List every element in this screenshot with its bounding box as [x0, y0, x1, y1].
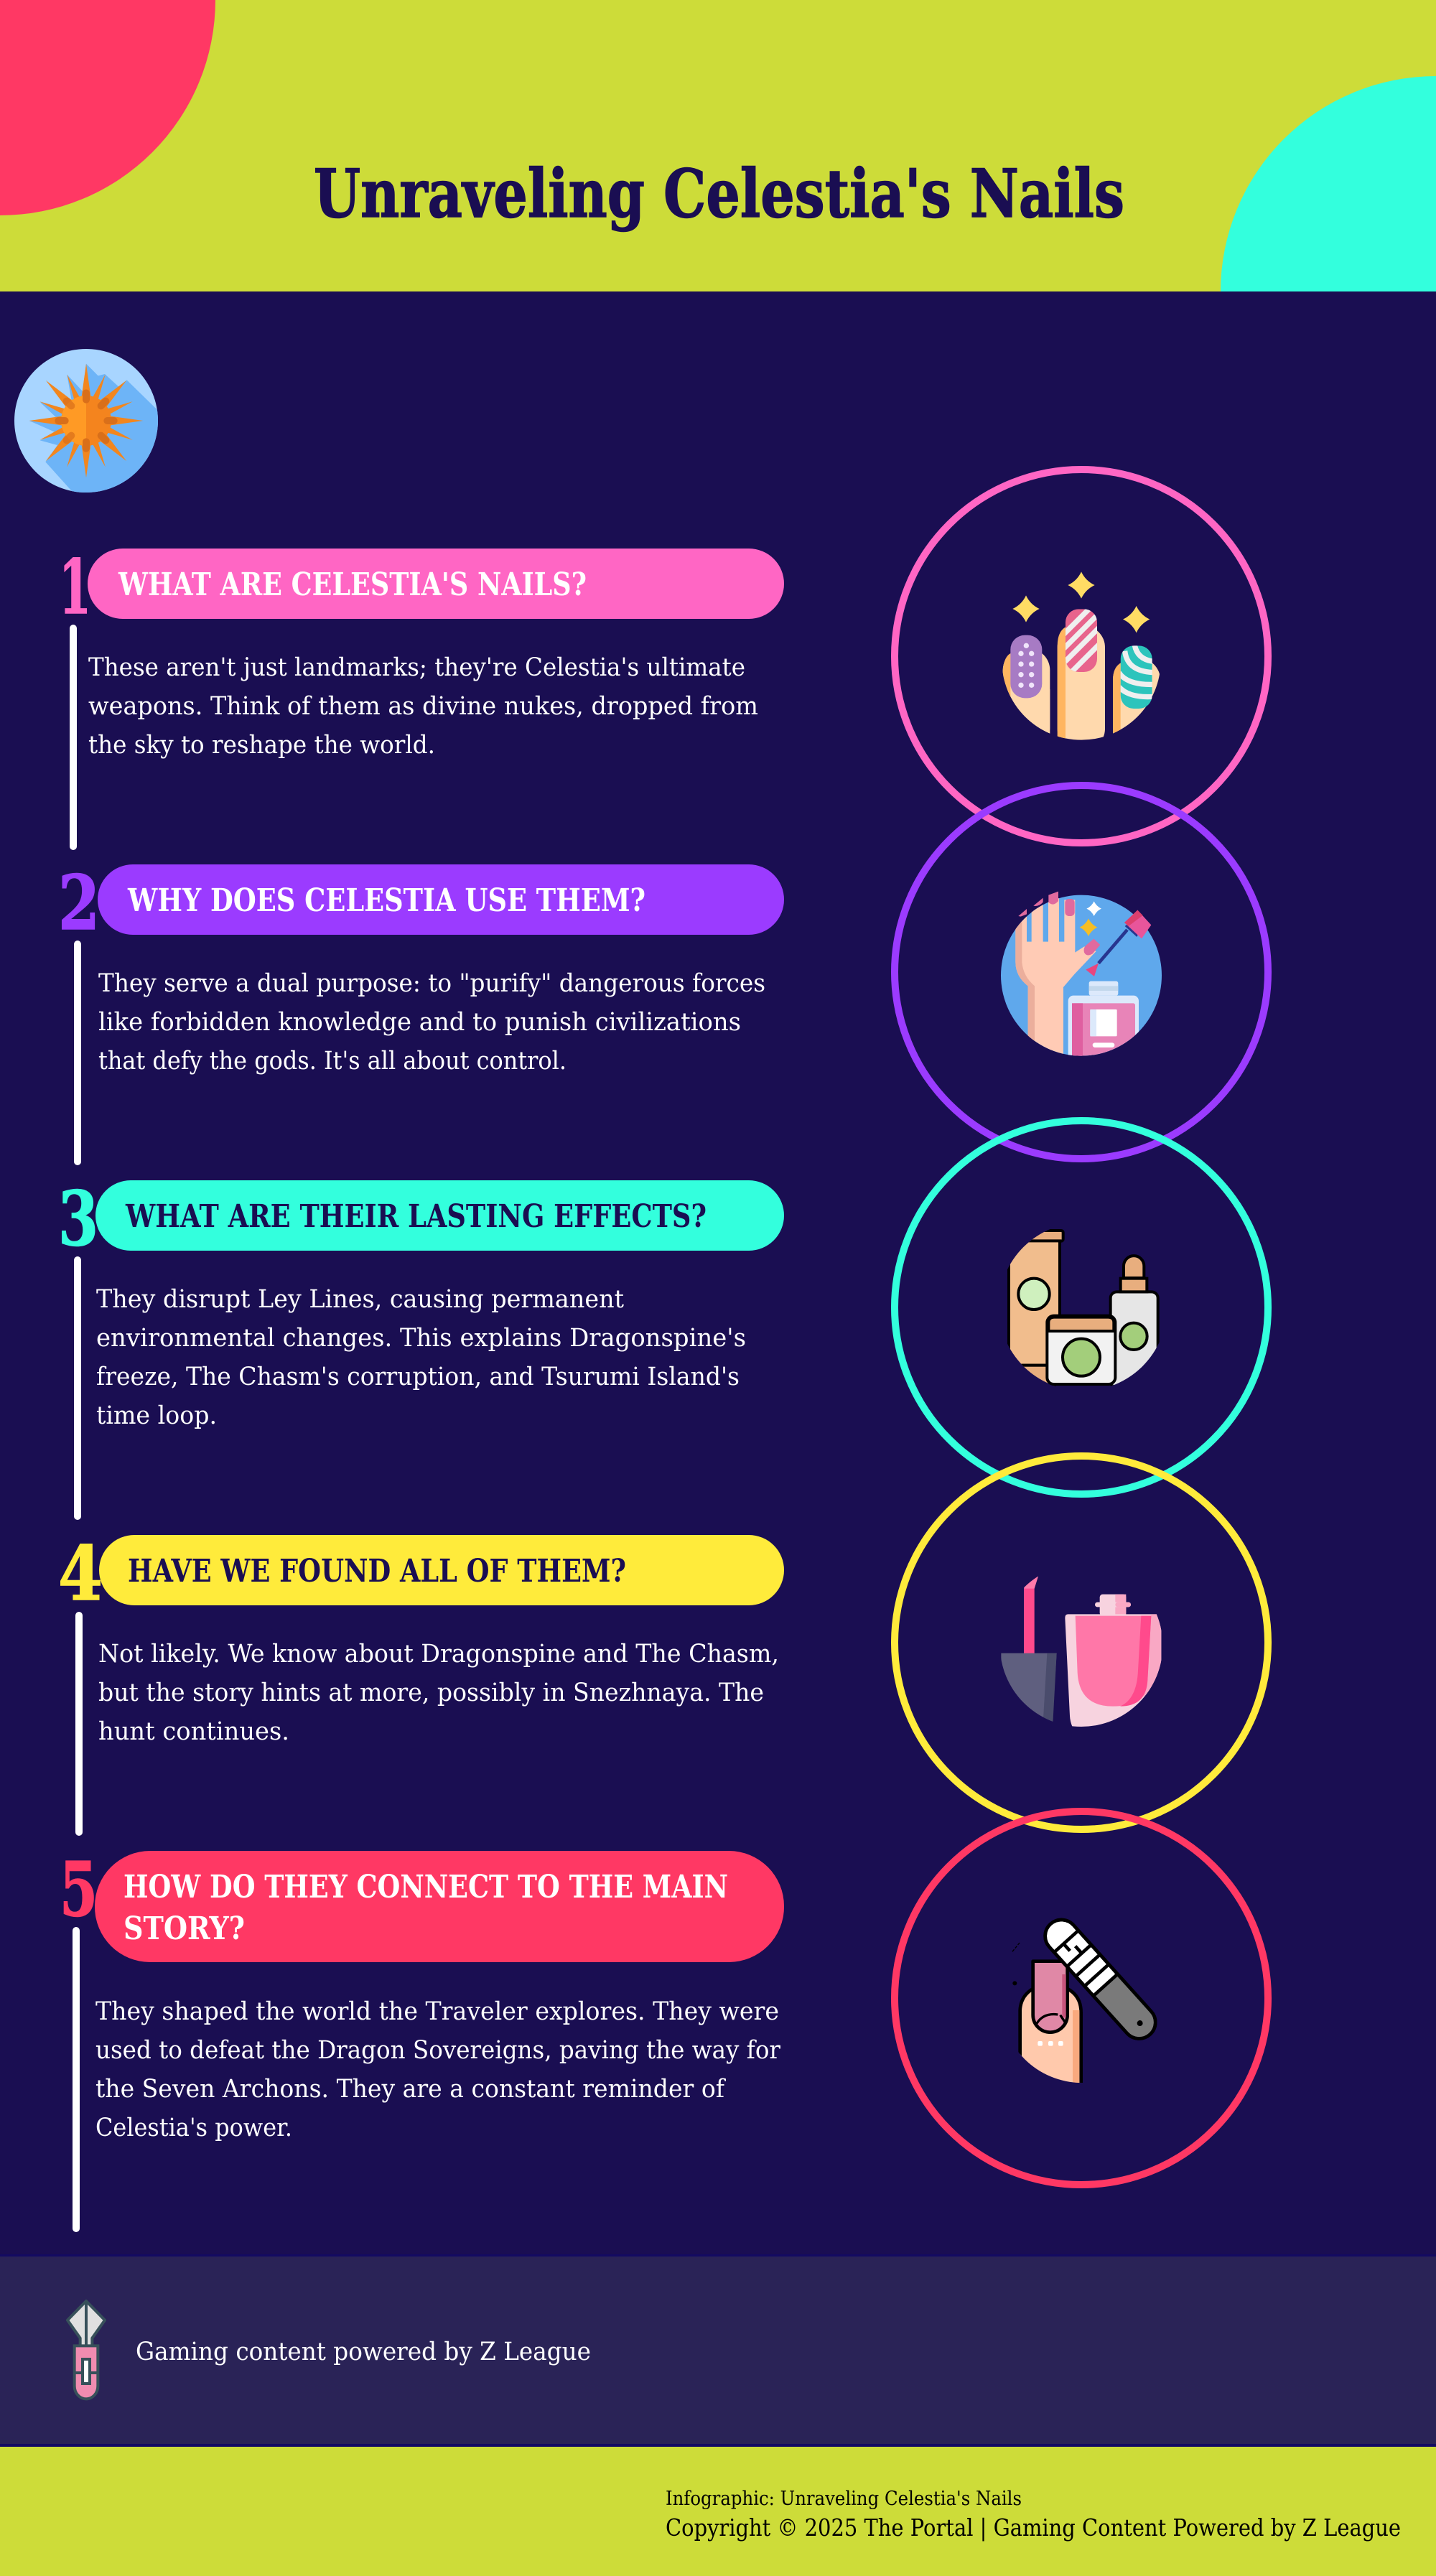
heading 3: WHAT ARE THEIR LASTING EFFECTS? [125, 1198, 707, 1235]
vertical bar 4 [75, 1612, 83, 1836]
footer band [0, 2254, 1436, 2447]
vertical bar 2 [74, 941, 81, 1165]
heading 4: HAVE WE FOUND ALL OF THEM? [128, 1553, 626, 1590]
icon: sun emblem [14, 349, 167, 498]
number 3: 3 [58, 1175, 98, 1263]
body text 3: environmental changes. This explains Dragonspine's [96, 1324, 746, 1353]
section 2 [58, 859, 784, 1165]
icon: hand and polish [1001, 892, 1162, 1060]
header banner [0, 0, 1436, 291]
body text 5 [95, 1997, 780, 2142]
body text 1: the sky to reshape the world. [88, 731, 435, 760]
body text 3: freeze, The Chasm's corruption, and Tsurumi Island's [96, 1363, 740, 1391]
decorative cyan quarter circle [1221, 76, 1436, 291]
body text 4: but the story hints at more, possibly in Snezhnaya. The [98, 1679, 764, 1707]
body text 2: They serve a dual purpose: to "purify" dangerous forces [98, 969, 765, 998]
heading 5: HOW DO THEY CONNECT TO THE MAIN [123, 1869, 728, 1905]
heading pill 5 [95, 1851, 784, 1962]
heading 5 [123, 1869, 728, 1947]
icon: decorated nails [1002, 571, 1160, 740]
section 3 [58, 1175, 784, 1520]
body text 3 [96, 1285, 746, 1430]
heading pill 4 [99, 1535, 784, 1605]
heading pill 3 [95, 1180, 784, 1251]
icon: nail and file [1012, 1913, 1162, 2087]
title: Unraveling Celestia's Nails [314, 154, 1124, 233]
section 1 [59, 543, 784, 850]
ring 4 [895, 1456, 1268, 1829]
icon: league emblem [67, 2301, 105, 2399]
body text 4: Not likely. We know about Dragonspine and The Chasm, [98, 1640, 779, 1669]
body text 3: time loop. [96, 1401, 217, 1430]
ring 3 [895, 1121, 1268, 1494]
number 2: 2 [58, 859, 100, 947]
icon: cosmetics [1009, 1231, 1158, 1388]
body text 2 [98, 969, 765, 1075]
body text 5: used to defeat the Dragon Sovereigns, paving the way for [95, 2036, 780, 2065]
number 5: 5 [60, 1845, 98, 1933]
footer band text: Gaming content powered by Z League [136, 2338, 591, 2366]
body text 5: the Seven Archons. They are a constant reminder of [95, 2075, 727, 2104]
bottom credits bar [0, 2447, 1436, 2576]
ring 1 [895, 470, 1268, 843]
body text 1 [88, 653, 758, 760]
heading 2: WHY DOES CELESTIA USE THEM? [127, 882, 645, 919]
vertical bar 5 [73, 1927, 80, 2232]
number 4: 4 [58, 1529, 103, 1618]
body text 5: Celestia's power. [95, 2114, 292, 2142]
heading pill 2 [98, 864, 784, 935]
number 1: 1 [59, 543, 91, 631]
body text 3: They disrupt Ley Lines, causing permanent [96, 1285, 624, 1314]
heading 5: STORY? [123, 1910, 245, 1947]
section 4 [58, 1529, 784, 1836]
body text 1: weapons. Think of them as divine nukes, dropped from [88, 692, 758, 721]
credit line: Infographic: Unraveling Celestia's Nails [666, 2488, 1022, 2510]
body text 2: that defy the gods. It's all about control. [98, 1047, 567, 1075]
body text 4 [98, 1640, 779, 1746]
heading pill 1 [88, 549, 784, 619]
body text 2: like forbidden knowledge and to punish civilizations [98, 1008, 741, 1037]
ring 2 [895, 785, 1268, 1159]
icon: polish bottle and brush [1001, 1576, 1162, 1727]
decorative red quarter circle [0, 0, 215, 215]
vertical bar 1 [70, 625, 77, 850]
heading 1: WHAT ARE CELESTIA'S NAILS? [118, 566, 587, 603]
body text 1: These aren't just landmarks; they're Celestia's ultimate [88, 653, 745, 682]
section 5 [60, 1845, 784, 2232]
body text 4: hunt continues. [98, 1717, 289, 1746]
body text 5: They shaped the world the Traveler explores. They were [95, 1997, 779, 2026]
vertical bar 3 [74, 1256, 81, 1520]
ring 5 [895, 1811, 1268, 2185]
